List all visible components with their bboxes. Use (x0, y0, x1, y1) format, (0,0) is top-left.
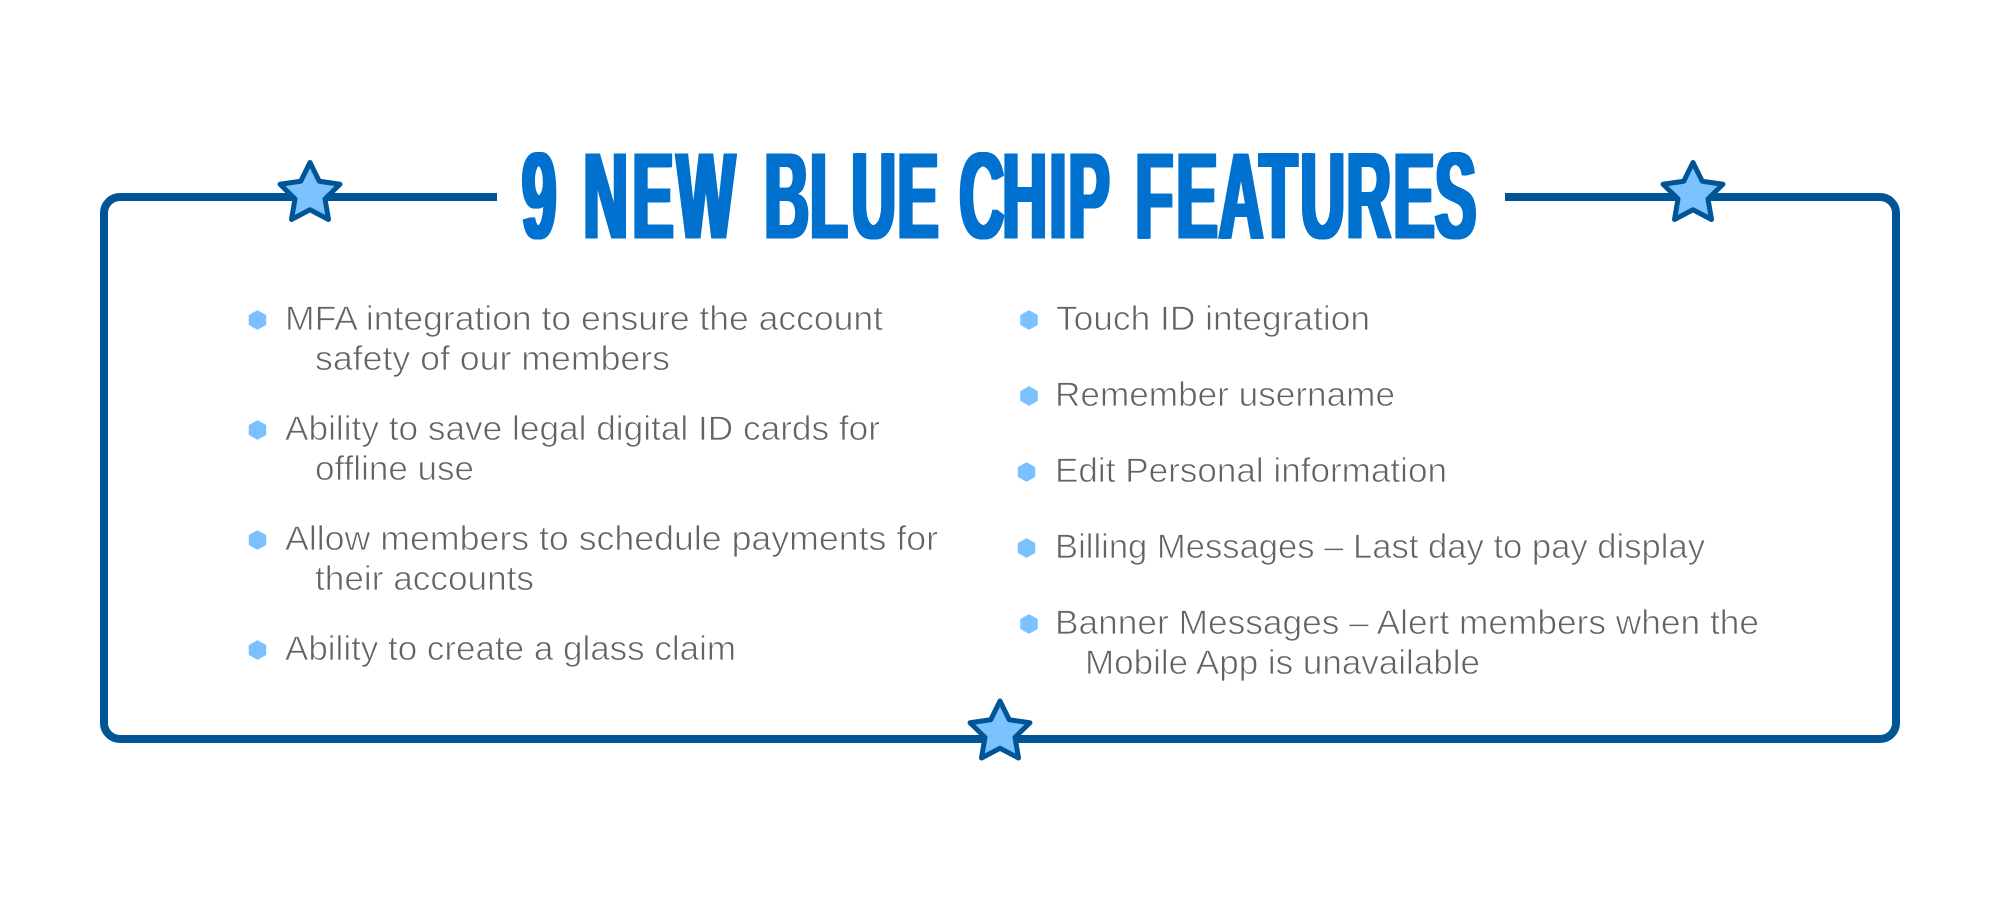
feature: billing messages: Billing Messages – Last day to pay display (1055, 528, 1705, 566)
feature: banner messages: Mobile App is unavailable (1085, 644, 1480, 682)
icon: star top left (280, 162, 340, 219)
feature: MFA integration: safety of our members (315, 340, 670, 378)
feature: digital ID cards: offline use (315, 450, 474, 488)
feature: MFA integration: MFA integration to ensure the account (285, 300, 884, 338)
feature: Touch ID: Touch ID integration (1056, 300, 1370, 338)
feature: banner messages (1021, 604, 1759, 682)
feature: banner messages: Banner Messages – Alert members when the (1055, 604, 1759, 642)
panel: right feature list (1018, 300, 1759, 682)
title: NEW (583, 127, 736, 265)
feature: schedule payments: their accounts (315, 560, 534, 598)
title (522, 127, 1476, 265)
icon: star top right (1663, 162, 1723, 219)
panel: rounded frame (104, 197, 1896, 739)
title: 9 (522, 127, 556, 265)
title: CHIP (960, 127, 1110, 265)
feature: remember username: Remember username (1055, 376, 1395, 414)
feature: digital ID cards (250, 410, 880, 488)
panel: left feature list (250, 300, 938, 668)
icon: star bottom centre (970, 701, 1030, 758)
feature: MFA integration (250, 300, 884, 378)
feature: edit personal information: Edit Personal information (1055, 452, 1447, 490)
feature: digital ID cards: Ability to save legal digital ID cards for (285, 410, 880, 448)
feature: glass claim: Ability to create a glass claim (285, 630, 736, 668)
feature: schedule payments (250, 520, 938, 598)
title: FEATURES (1135, 127, 1476, 265)
feature: schedule payments: Allow members to schedule payments for (285, 520, 938, 558)
title: BLUE (764, 127, 939, 265)
